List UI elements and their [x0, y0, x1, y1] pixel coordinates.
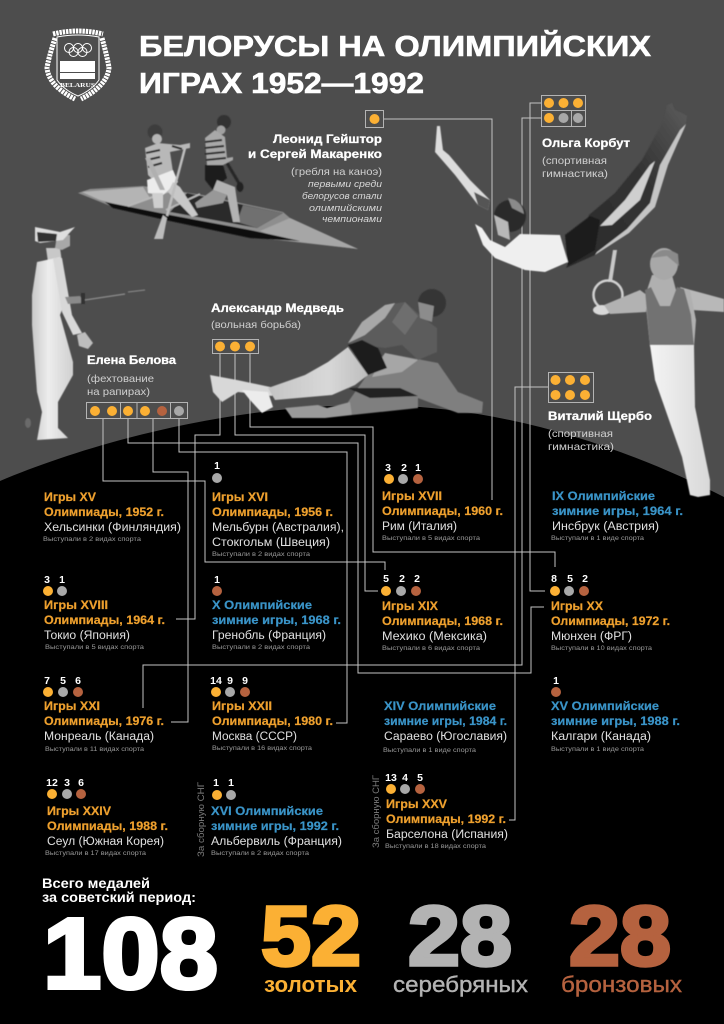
- game: XV Olympiad 1952: [43, 492, 181, 543]
- game: XVI Olympiad 1956: Игры XVI: [212, 492, 268, 504]
- game: XXV Olympiad 1992: 13: [385, 772, 397, 784]
- game: XXI Olympiad 1976: 7: [44, 675, 50, 687]
- caption: Александр Медведь: Александр Медведь: [211, 303, 344, 315]
- game: XVI Winter 1992: зимние игры, 1992 г.: [211, 821, 339, 833]
- connector: Медведь to Games XIX: [235, 353, 378, 591]
- game: IX Winter 1964: зимние игры, 1964 г.: [552, 506, 683, 518]
- game: XVI Olympiad 1956: Стокгольм (Швеция): [212, 537, 330, 549]
- caption: Ольга Корбут: (спортивная: [542, 155, 607, 167]
- game: XVI Winter 1992: 1: [213, 777, 219, 789]
- game: XVIII Olympiad 1964: Выступали в 5 видах спорта: [45, 644, 144, 651]
- game: XX Olympiad 1972: Игры XX: [551, 601, 603, 613]
- game: XVII Olympiad 1960: Игры XVII: [382, 491, 442, 503]
- game: XV Olympiad 1952: Олимпиады, 1952 г.: [44, 507, 164, 519]
- game: X Winter 1968: Гренобль (Франция): [212, 630, 326, 642]
- game: XIV Winter 1984: зимние игры, 1984 г.: [384, 716, 507, 728]
- panel: Гейштор и Макаренко caption: [248, 134, 383, 225]
- title: БЕЛОРУСЫ НА ОЛИМПИЙСКИХ: [139, 29, 652, 63]
- game: XV Olympiad 1952: Игры XV: [44, 492, 96, 504]
- game: XVII Olympiad 1960: [382, 462, 503, 542]
- description: белорусов стали: [302, 191, 383, 202]
- game: XVI Olympiad 1956: Мельбурн (Австралия),: [212, 522, 344, 534]
- game: XIX Olympiad 1968: 2: [414, 573, 420, 585]
- game: XVIII Olympiad 1964: 3: [44, 574, 50, 586]
- game: XV Winter 1988: Калгари (Канада): [551, 731, 651, 743]
- game: XVIII Olympiad 1964: 1: [59, 574, 65, 586]
- game: XX Olympiad 1972: 8: [551, 573, 557, 585]
- game: XXI Olympiad 1976: Олимпиады, 1976 г.: [44, 716, 164, 728]
- total medals label: за советский период:: [42, 889, 196, 905]
- game: XVI Winter 1992: Альбервиль (Франция): [211, 836, 342, 848]
- game: XXIV Olympiad 1988: 3: [64, 777, 70, 789]
- caption: Елена Белова: (фехтование: [87, 373, 154, 385]
- game: XIX Olympiad 1968: 5: [383, 573, 389, 585]
- game: XVIII Olympiad 1964: [43, 574, 165, 651]
- connector: Медведь to Games XVIII: [176, 353, 220, 619]
- game: XX Olympiad 1972: Олимпиады, 1972 г.: [551, 616, 670, 628]
- game: XIX Olympiad 1968: Игры XIX: [382, 601, 438, 613]
- game: XXI Olympiad 1976: Игры XXI: [44, 701, 100, 713]
- gold medals count: 52: [261, 889, 361, 983]
- game: XXV Olympiad 1992: Выступали в 18 видах спорта: [385, 843, 486, 850]
- game: XVI Olympiad 1956: Олимпиады, 1956 г.: [212, 507, 333, 519]
- game: XVII Olympiad 1960: Рим (Италия): [382, 521, 457, 533]
- game: XVI Olympiad 1956: Выступали в 2 видах спорта: [212, 551, 310, 558]
- game: IX Winter 1964: Выступали в 1 виде спорта: [551, 535, 644, 542]
- caption: Ольга Корбут: [542, 138, 630, 180]
- game: XVII Olympiad 1960: 2: [401, 462, 407, 474]
- game: XVII Olympiad 1960: Олимпиады, 1960 г.: [382, 506, 503, 518]
- game: XIV Winter 1984: XIV Олимпийские: [384, 701, 496, 713]
- game: XXIV Olympiad 1988: 12: [46, 777, 58, 789]
- total medals label: [42, 875, 196, 905]
- description: олимпийскими: [309, 203, 383, 214]
- title: ИГРАХ 1952—1992: [139, 68, 424, 100]
- medals: Корбут: [541, 96, 586, 126]
- silver medals count: 28: [408, 889, 512, 983]
- game: XXI Olympiad 1976: Выступали в 11 видах спорта: [45, 746, 144, 753]
- game: XVI Olympiad 1956: [212, 460, 344, 558]
- game: XVII Olympiad 1960: 1: [415, 462, 421, 474]
- medals: Медведь: [212, 340, 258, 354]
- game: XXII Olympiad 1980: 14: [210, 675, 222, 687]
- bronze medals count: 28: [569, 889, 671, 983]
- game: XVIII Olympiad 1964: Игры XVIII: [44, 600, 108, 612]
- connector lines between athletes and games: [103, 103, 555, 820]
- game: XX Olympiad 1972: [550, 573, 670, 652]
- game: XVIII Olympiad 1964: Токио (Япония): [44, 630, 130, 642]
- game: XXI Olympiad 1976: 5: [60, 675, 66, 687]
- caption: Виталий Щербо: (спортивная: [548, 428, 613, 440]
- connector: Корбут to Games XXI: [143, 118, 541, 708]
- photo: canoeists Geishtor and Makarenko: [78, 115, 358, 249]
- caption: Виталий Щербо: [548, 411, 652, 453]
- game: XXIV Olympiad 1988: Игры XXIV: [47, 806, 111, 818]
- photo: gymnast Olga Korbut: [435, 103, 687, 272]
- note: for CIS team, winter 1992: За сборную СНГ: [196, 782, 207, 857]
- game: XXII Olympiad 1980: Игры XXII: [212, 701, 272, 713]
- connector: Белова to Games XX: [128, 419, 544, 673]
- description: [291, 166, 383, 225]
- game: XVI Winter 1992: [211, 777, 342, 857]
- game: X Winter 1968: 1: [214, 574, 220, 586]
- game: XX Olympiad 1972: 2: [582, 573, 588, 585]
- game: X Winter 1968: зимние игры, 1968 г.: [212, 615, 341, 627]
- game: XXII Olympiad 1980: 9: [227, 675, 233, 687]
- game: XVII Olympiad 1960: Выступали в 5 видах спорта: [382, 535, 480, 542]
- medals: Белова: [86, 402, 188, 418]
- game: X Winter 1968: [212, 574, 341, 651]
- game: XIV Winter 1984: Выступали в 1 виде спорта: [383, 747, 476, 754]
- connector: Белова to Games XXI: [153, 419, 188, 722]
- game: XXII Olympiad 1980: 9: [242, 675, 248, 687]
- game: XVI Olympiad 1956: 1: [214, 460, 220, 472]
- caption: Елена Белова: [87, 355, 177, 398]
- game: XXI Olympiad 1976: 6: [75, 675, 81, 687]
- game: XXIV Olympiad 1988: Выступали в 17 видах спорта: [45, 850, 146, 857]
- game: XX Olympiad 1972: 5: [567, 573, 573, 585]
- connector: Гейштор to Games XVII: [384, 119, 492, 500]
- bronze medals count: [561, 889, 682, 997]
- caption: Александр Медведь: [211, 303, 344, 331]
- game: XVI Winter 1992: XVI Олимпийские: [211, 806, 323, 818]
- game: XXI Olympiad 1976: Монреаль (Канада): [44, 731, 154, 743]
- game: XXIV Olympiad 1988: Олимпиады, 1988 г.: [47, 821, 168, 833]
- photo: fencer Elena Belova: [25, 227, 145, 440]
- game: XXII Olympiad 1980: Олимпиады, 1980 г.: [212, 716, 333, 728]
- game: XV Winter 1988: XV Олимпийские: [551, 701, 659, 713]
- game: XVI Winter 1992: 1: [228, 777, 234, 789]
- description: первыми среди: [308, 179, 383, 190]
- logo: Olympic committee of Belarus emblem: [47, 31, 109, 99]
- game: X Winter 1968: Х Олимпийские: [212, 600, 312, 612]
- photo: gymnast Vitaly Scherbo on rings: [593, 248, 724, 497]
- game: XV Winter 1988: 1: [553, 675, 559, 687]
- total medals label: Всего медалей: [42, 875, 150, 891]
- game: XIX Olympiad 1968: Олимпиады, 1968 г.: [382, 616, 503, 628]
- game: XIX Olympiad 1968: Мехико (Мексика): [382, 631, 487, 643]
- game: XXIV Olympiad 1988: Сеул (Южная Корея): [47, 836, 164, 848]
- game: XV Winter 1988: [551, 675, 680, 753]
- game: XV Olympiad 1952: Выступали в 2 видах спорта: [43, 536, 141, 543]
- description: чемпионами: [322, 214, 383, 225]
- photo: wrestlers with Aleksandr Medved: [210, 289, 483, 418]
- name: Леонид Гейштор: [273, 134, 382, 146]
- game: IX Winter 1964: [551, 491, 683, 542]
- game: XXIV Olympiad 1988: 6: [78, 777, 84, 789]
- game: XV Winter 1988: зимние игры, 1988 г.: [551, 716, 680, 728]
- game: XIX Olympiad 1968: 2: [399, 573, 405, 585]
- game: XXV Olympiad 1992: Барселона (Испания): [386, 829, 508, 841]
- medals: Гейштор: [366, 110, 384, 128]
- caption: Ольга Корбут: гимнастика): [542, 168, 608, 180]
- game: XIX Olympiad 1968: [381, 573, 503, 652]
- game: XXV Olympiad 1992: 4: [402, 772, 408, 784]
- title: [139, 29, 652, 100]
- logo: Olympic committee of Belarus emblem: BELARUS: [60, 82, 95, 89]
- game: XXV Olympiad 1992: Игры XXV: [386, 799, 447, 811]
- game: IX Winter 1964: IX Олимпийские: [552, 491, 655, 503]
- description: (гребля на каноэ): [291, 166, 382, 178]
- connector: Корбут to Games XX: [530, 103, 545, 591]
- connector: Белова to Games XXII: [179, 419, 347, 723]
- caption: Ольга Корбут: Ольга Корбут: [542, 138, 630, 150]
- caption: Виталий Щербо: гимнастика): [548, 441, 614, 453]
- connector: Белова to Games XIX: [103, 419, 385, 570]
- game: XXIV Olympiad 1988: [45, 777, 168, 857]
- game: IX Winter 1964: Инсбрук (Австрия): [552, 521, 659, 533]
- game: XVI Winter 1992: Выступали в 2 видах спорта: [211, 850, 309, 857]
- bronze medals count: бронзовых: [561, 972, 682, 997]
- game: X Winter 1968: Выступали в 2 видах спорта: [212, 644, 310, 651]
- game: XX Olympiad 1972: Мюнхен (ФРГ): [551, 631, 632, 643]
- game: XIX Olympiad 1968: Выступали в 6 видах спорта: [382, 645, 480, 652]
- game: XVIII Olympiad 1964: Олимпиады, 1964 г.: [44, 615, 165, 627]
- game: XXI Olympiad 1976: [43, 675, 164, 753]
- game: XIV Winter 1984: [383, 701, 507, 754]
- caption: Виталий Щербо: Виталий Щербо: [548, 411, 652, 423]
- game: XVII Olympiad 1960: 3: [385, 462, 391, 474]
- game: XV Olympiad 1952: Хельсинки (Финляндия): [44, 522, 181, 534]
- game: XXII Olympiad 1980: Москва (СССР): [212, 731, 297, 743]
- background: black curved lower area: [0, 405, 724, 1024]
- silver medals count: серебряных: [393, 972, 528, 997]
- game: XXII Olympiad 1980: Выступали в 16 видах спорта: [212, 745, 312, 752]
- game: XXV Olympiad 1992: [385, 772, 508, 850]
- connector: Щербо to Games XXV: [509, 387, 548, 820]
- game: XXII Olympiad 1980: [210, 675, 333, 752]
- game: XXV Olympiad 1992: 5: [417, 772, 423, 784]
- gold medals count: золотых: [264, 972, 358, 997]
- panel: Гейштор и Макаренко caption: и Сергей Макаренко: [248, 149, 382, 161]
- caption: Елена Белова: на рапирах): [87, 386, 150, 398]
- silver medals count: [393, 889, 528, 997]
- game: XIV Winter 1984: Сараево (Югославия): [384, 731, 507, 743]
- connector: Медведь to Games XX: [250, 353, 555, 567]
- total medals number: 108: [43, 898, 218, 1010]
- note: for CIS team, summer 1992: За сборную СНГ: [371, 775, 382, 848]
- caption: Елена Белова: Елена Белова: [87, 355, 177, 367]
- medals: Щербо: [548, 372, 594, 402]
- caption: Александр Медведь: (вольная борьба): [211, 319, 301, 331]
- game: XX Olympiad 1972: Выступали в 10 видах спорта: [551, 645, 652, 652]
- game: XV Winter 1988: Выступали в 1 виде спорта: [551, 746, 644, 753]
- game: XXV Olympiad 1992: Олимпиады, 1992 г.: [386, 814, 506, 826]
